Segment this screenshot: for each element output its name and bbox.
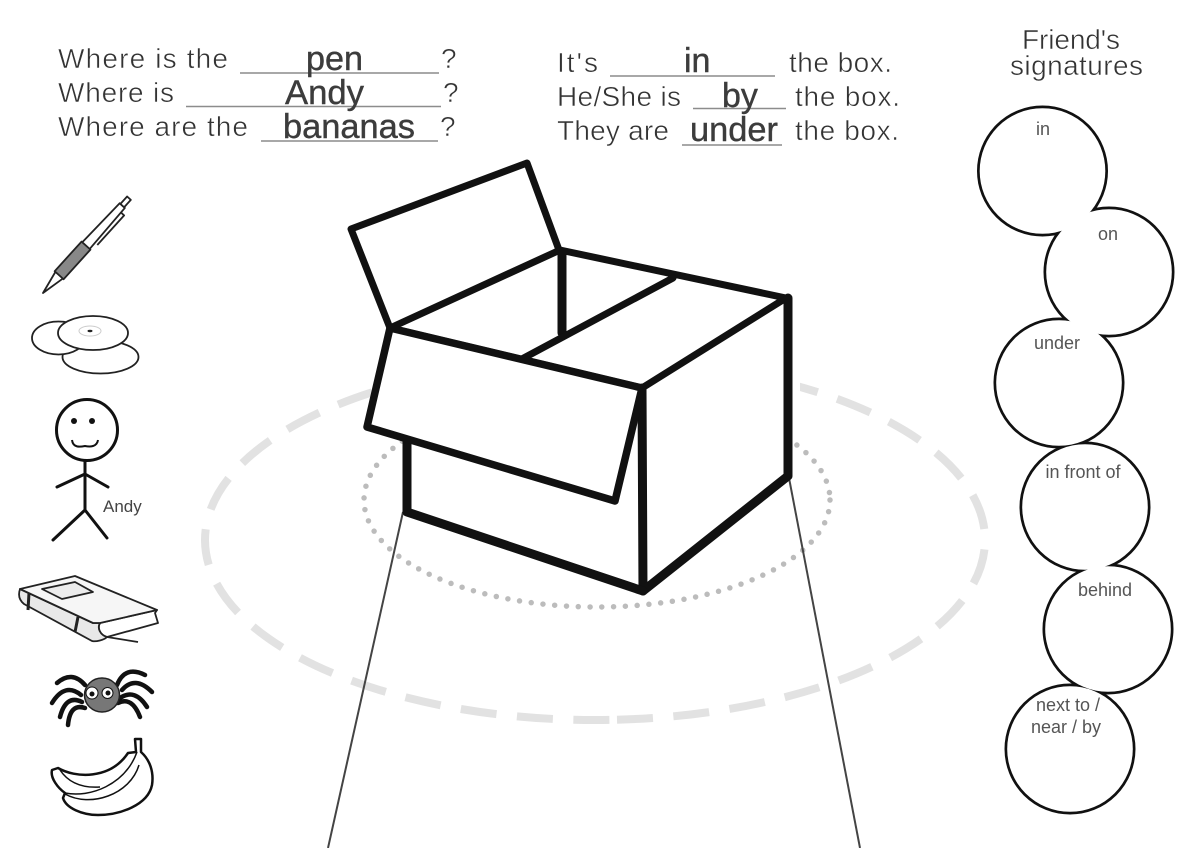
heading: friend's signatures: signatures <box>1010 50 1143 81</box>
inner centre fold <box>520 278 673 360</box>
left perspective line <box>328 512 403 848</box>
answer 3 <box>557 111 899 149</box>
answer 2: He/She is <box>557 81 681 112</box>
box fill <box>340 161 788 592</box>
question 2 <box>58 74 459 112</box>
box rim <box>390 250 786 388</box>
questions block <box>58 40 459 146</box>
answer 1: in <box>684 42 710 80</box>
answer 2 <box>557 77 900 115</box>
answer 2: by <box>722 77 758 115</box>
icon: bananas <box>52 739 153 815</box>
open cardboard box <box>340 161 800 592</box>
bubble label: next to / near / by: next to / <box>1036 695 1100 715</box>
bubble label: next to / near / by: near / by <box>1031 717 1101 737</box>
answer 2: the box. <box>795 81 900 112</box>
outer dashed ellipse <box>205 360 985 720</box>
box fill behind the lid gap <box>782 300 800 391</box>
answer 1 <box>557 42 892 80</box>
bubble label: behind: behind <box>1078 580 1132 600</box>
question 1: Where is the <box>58 43 228 74</box>
question 2: ? <box>443 77 459 108</box>
bubble label: next to / near / by <box>1031 695 1101 737</box>
front wall <box>407 442 643 591</box>
question 3: Where are the <box>58 111 248 142</box>
right side wall <box>642 298 788 591</box>
answers block <box>557 42 900 149</box>
answer 3: under <box>690 111 778 149</box>
answer 3: the box. <box>795 115 899 146</box>
bubble label: in: in <box>1036 119 1050 139</box>
icon: pen <box>39 194 135 298</box>
question 1: pen <box>306 40 363 78</box>
heading: friend's signatures <box>1010 24 1143 81</box>
icon: spider <box>52 672 152 725</box>
right perspective line <box>789 478 860 848</box>
bubble label: on: on <box>1098 224 1118 244</box>
inner dotted ellipse <box>364 393 830 607</box>
signature bubble chain <box>978 107 1173 813</box>
open back flap <box>351 163 559 328</box>
inner back corner <box>558 253 566 333</box>
answer 1: It's <box>557 47 598 78</box>
bubble label: in front of: in front of <box>1045 462 1122 482</box>
bubble label: under: under <box>1034 333 1080 353</box>
question 1 <box>58 40 457 78</box>
icon: stick figure Andy: Andy <box>103 497 142 516</box>
question 2: Andy <box>285 74 364 112</box>
answer 3: They are <box>557 115 669 146</box>
answer 1: the box. <box>789 47 892 78</box>
question 3: ? <box>440 111 456 142</box>
icon: book <box>19 576 158 642</box>
icon: compact discs <box>32 316 138 374</box>
question 2: Where is <box>58 77 174 108</box>
front flap <box>367 328 642 501</box>
heading: friend's signatures: Friend's <box>1022 24 1120 55</box>
question 1: ? <box>441 43 457 74</box>
question 3 <box>58 108 456 146</box>
icon: stick figure Andy <box>53 400 142 540</box>
question 3: bananas <box>283 108 415 146</box>
